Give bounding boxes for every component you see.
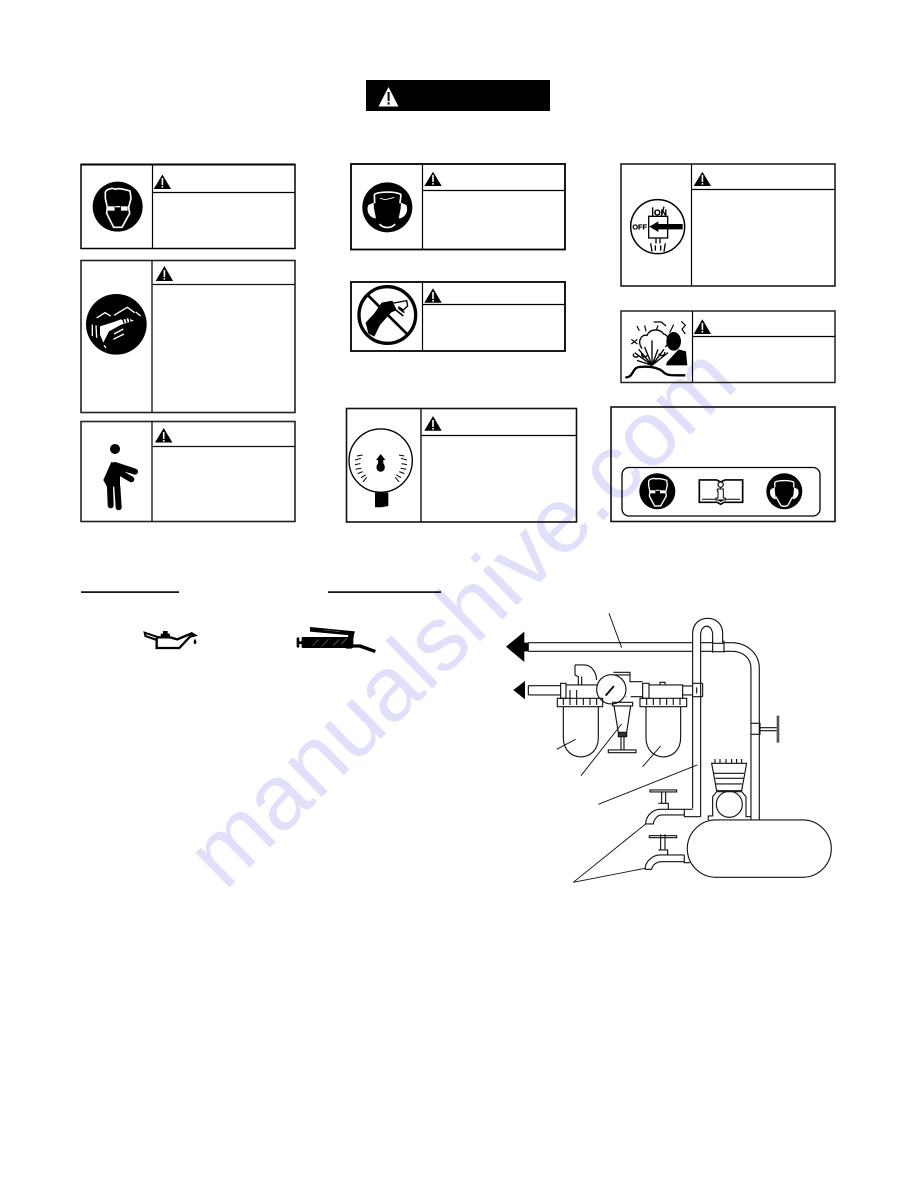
icon: warning triangle [424,288,442,303]
icon: grease gun [297,627,376,653]
compressor pump [712,759,747,791]
icon: banner warning triangle [378,87,398,106]
icon: warning triangle [155,428,172,442]
branch line and lubricator [528,665,597,698]
panel: disconnect power warning [621,164,835,286]
icon: warning triangle [424,172,442,186]
icon: warning triangle [424,416,442,431]
panel: hand hazard warning [81,260,295,412]
leader lines [557,613,697,882]
icon: prohibited hand [359,287,416,343]
panel: lifting warning [81,421,295,522]
panel: ear protection warning [351,164,565,250]
drain valve upper [646,790,684,824]
air tank [687,820,831,877]
heading rule left [81,591,179,593]
panel: eye protection warning [81,164,295,249]
arrow: branch outlet [513,681,525,699]
icon: warning triangle [154,174,171,189]
panel: protective equipment notice [611,407,835,522]
icon: ear muffs head [362,182,412,232]
icon: off switch: ON [654,208,667,218]
icon: pressure gauge [349,429,412,507]
panel: explosion warning [621,311,835,382]
drain filter [608,702,636,753]
arrow: main outlet [506,632,528,662]
valve on riser [751,723,777,734]
icon: lifting figure [103,444,135,507]
icon: warning triangle [156,266,173,281]
icon: off switch [631,200,685,254]
icon: manual book [699,480,743,504]
drain valve lower [645,834,690,869]
icon: goggles head [93,182,143,232]
icon strip [622,468,820,516]
title banner [366,80,550,111]
icon: hand on hot surface [86,294,147,355]
icon: off switch: OFF [632,222,648,231]
icon: oil can [145,631,196,648]
panel: do not touch warning [351,282,565,351]
icon: warning triangle [694,319,711,334]
diagram: compressed air system [506,613,831,882]
filter [643,682,683,698]
icon: goggles head small [639,473,675,509]
icon: ear muffs small [766,473,802,509]
gauge and regulator [597,675,626,704]
watermark: manualshive.com [168,327,755,906]
icon: warning triangle [694,172,711,186]
icon: burst hose with person [625,321,687,377]
U-bend and riser [684,618,723,817]
heading rule right [328,591,441,593]
panel: pressure gauge warning [346,408,576,522]
main air line [528,641,759,820]
